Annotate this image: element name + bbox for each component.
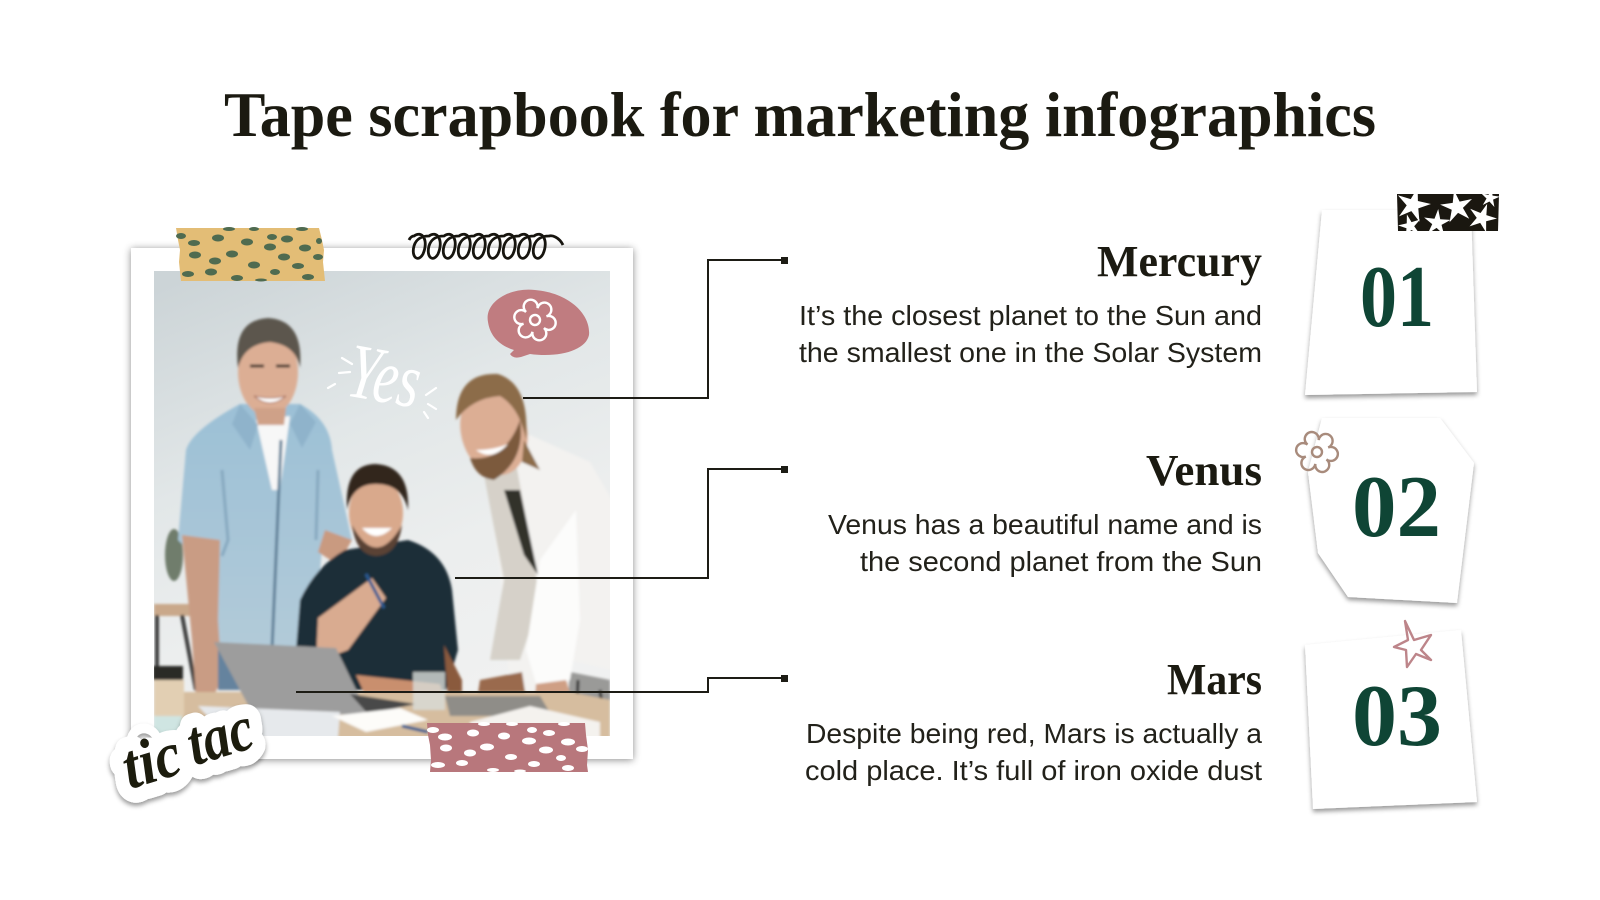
card: 02: 02 xyxy=(1352,459,1441,556)
text block: Venus: the second planet from the Sun xyxy=(860,546,1262,577)
icon: speech bubble with flower xyxy=(488,290,589,358)
text block: Venus xyxy=(828,446,1262,577)
left forearm xyxy=(182,535,222,702)
infographic canvas xyxy=(106,91,1499,815)
tape: yellow with green drops xyxy=(176,227,325,282)
icon: star outline xyxy=(1394,621,1431,667)
text block: Venus: Venus has a beautiful name and is xyxy=(828,509,1262,540)
sticker: tic tac xyxy=(113,692,262,803)
table xyxy=(154,692,610,738)
laptop xyxy=(214,642,368,716)
text block: Mercury xyxy=(799,237,1262,368)
connector lines xyxy=(296,257,788,692)
card: 01: 01 xyxy=(1360,249,1434,346)
connector: Venus xyxy=(455,469,784,578)
card: 02 xyxy=(1308,418,1474,603)
text block: Mars: Despite being red, Mars is actually a xyxy=(806,718,1262,749)
icon: black spring doodle xyxy=(409,234,563,258)
photo: three smiling colleagues at a desk xyxy=(153,271,612,740)
text block: Mars: cold place. It’s full of iron oxide dust xyxy=(805,755,1262,786)
card: 01 xyxy=(1305,210,1477,395)
text block: Mars: Mars xyxy=(1167,655,1262,704)
background table and plant xyxy=(154,604,190,616)
text block: Mars xyxy=(805,655,1262,786)
text block: Mercury: Mercury xyxy=(1097,237,1262,286)
card: 03: 03 xyxy=(1352,668,1442,765)
cup xyxy=(154,680,184,726)
man seated xyxy=(296,540,458,690)
man left xyxy=(178,404,352,660)
connector: Mars xyxy=(296,678,784,692)
panel: photo frame xyxy=(113,227,633,803)
connector end markers xyxy=(781,257,788,682)
card: 03 xyxy=(1305,630,1477,809)
man right xyxy=(507,436,592,691)
sticker: tic tac: tic xyxy=(113,718,189,803)
glass xyxy=(413,672,445,710)
tape: pink with white drops xyxy=(427,722,588,772)
tape: black with white stars xyxy=(1397,194,1499,231)
sticker: tic tac: tac xyxy=(178,692,262,779)
icon: handwritten yes: Yes xyxy=(342,326,428,424)
white photo card xyxy=(131,248,633,759)
text block: Venus: Venus xyxy=(1146,446,1262,495)
icon: flower outline xyxy=(1294,430,1340,474)
papers and notebook xyxy=(198,706,340,738)
chair at right xyxy=(565,672,610,736)
text block: Mercury: It’s the closest planet to the Sun and xyxy=(799,300,1262,331)
text block: Mercury: the smallest one in the Solar System xyxy=(799,337,1262,368)
connector: Mercury xyxy=(523,260,784,398)
title: Tape scrapbook for marketing infographics xyxy=(224,80,1376,150)
